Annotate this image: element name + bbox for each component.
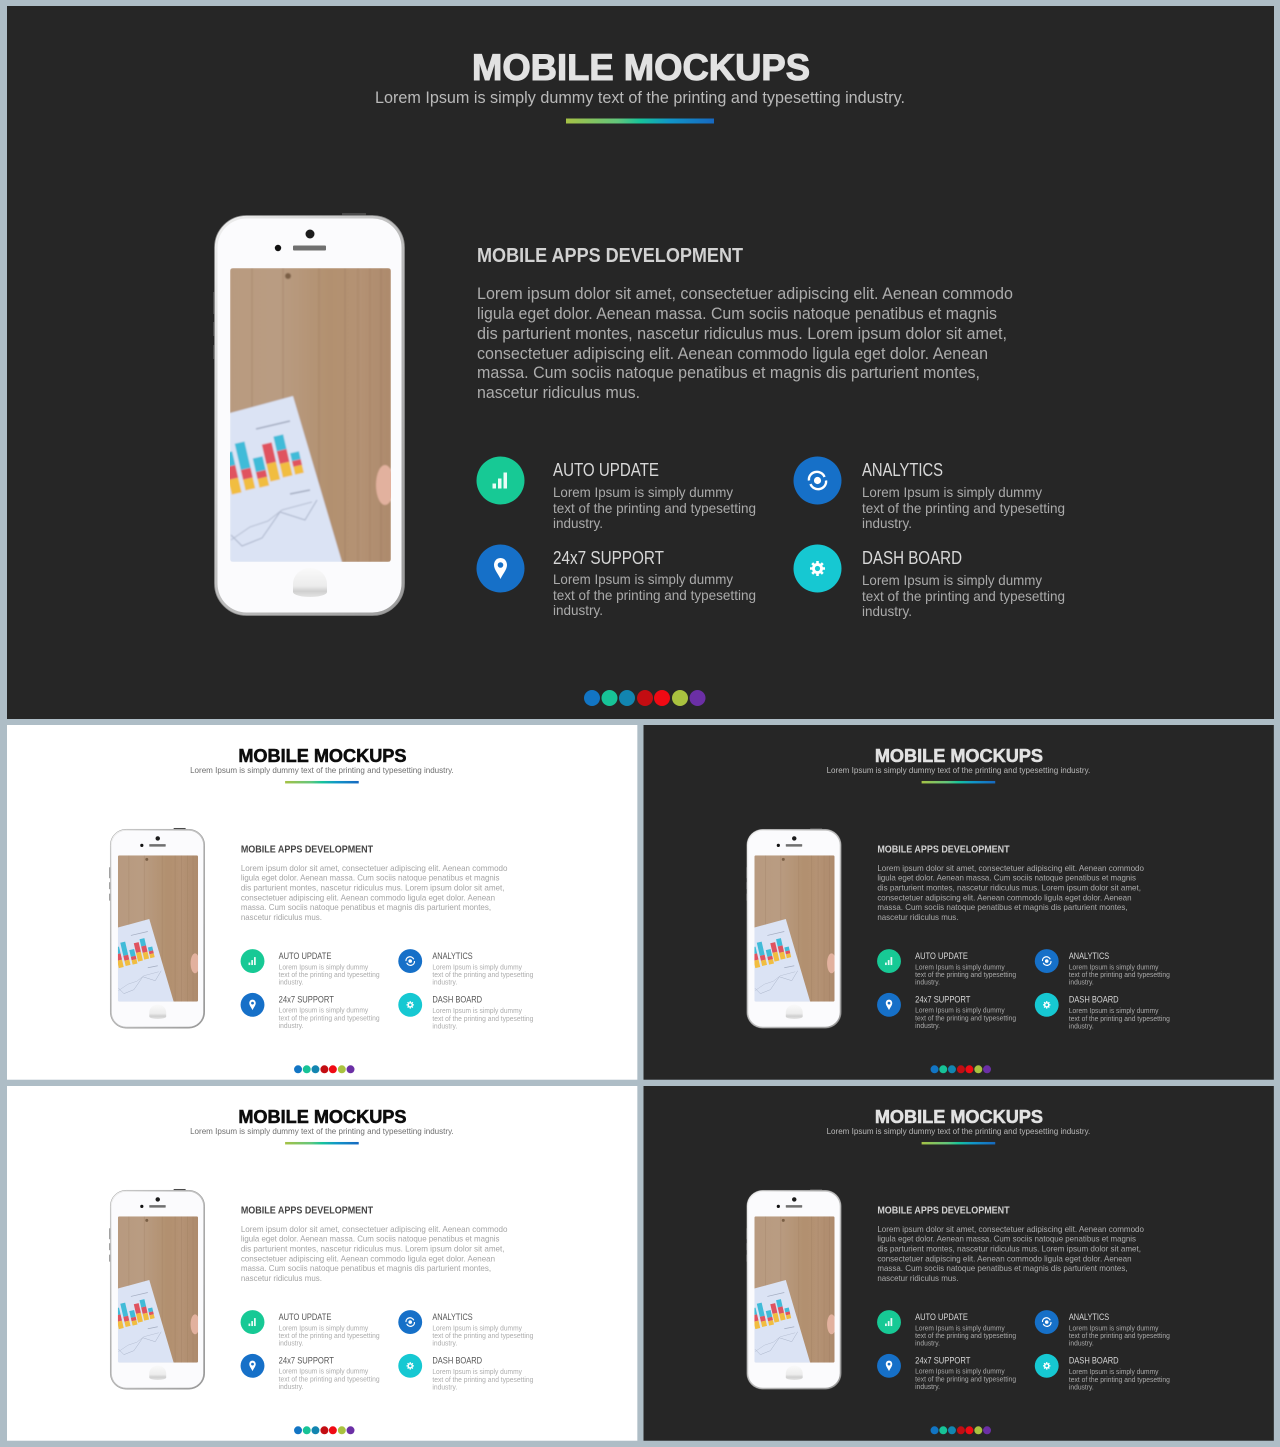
feature: auto update: text of the printing and typesetting [279,1333,380,1340]
title: MOBILE MOCKUPS [472,47,810,88]
feature: 24x7 support: 24x7 SUPPORT [279,1356,334,1366]
title: MOBILE MOCKUPS [238,745,406,766]
icon: gear [794,544,842,592]
icon: map pin [877,993,901,1017]
feature: analytics [398,1310,533,1348]
feature: auto update: text of the printing and typesetting [553,500,756,516]
feature: auto update [241,949,380,987]
feature: analytics: text of the printing and typesetting [1069,972,1170,979]
section heading: MOBILE APPS DEVELOPMENT [877,844,1010,855]
icon: bar signal [476,456,524,504]
body paragraph: massa. Cum sociis natoque penatibus et magnis dis parturient montes, [241,903,491,912]
gradient divider [922,781,995,783]
feature: dash board: Lorem Ipsum is simply dummy [432,1369,522,1376]
body paragraph: Lorem ipsum dolor sit amet, consectetuer adipiscing elit. Aenean commodo [241,864,508,873]
feature: analytics: ANALYTICS [1069,1312,1109,1322]
feature: 24x7 support: Lorem Ipsum is simply dummy [279,1369,369,1376]
icon: bar signal [241,949,264,973]
icon: eye [398,949,422,973]
feature: auto update: industry. [279,980,304,987]
feature: dash board: Lorem Ipsum is simply dummy [1069,1008,1159,1015]
feature: 24x7 support: Lorem Ipsum is simply dummy [915,1369,1005,1376]
feature: 24x7 support: industry. [915,1023,940,1030]
body paragraph: massa. Cum sociis natoque penatibus et magnis dis parturient montes, [241,1264,491,1273]
feature: analytics: industry. [1069,980,1094,987]
body paragraph: consectetuer adipiscing elit. Aenean commodo ligula eget dolor. Aenean [877,1255,1132,1264]
feature: dash board: text of the printing and typesetting [862,588,1065,604]
body paragraph: ligula eget dolor. Aenean massa. Cum sociis natoque penatibus et magnis [877,874,1136,883]
phone mockup [746,828,841,1028]
feature: dash board: Lorem Ipsum is simply dummy [1069,1369,1159,1376]
panel: small light slide, bottom left [7,1086,637,1441]
feature: 24x7 support [476,544,756,618]
feature: auto update: AUTO UPDATE [553,460,659,480]
feature: dash board: industry. [862,603,912,619]
body paragraph: nascetur ridiculus mus. [877,913,958,922]
body paragraph: massa. Cum sociis natoque penatibus et magnis dis parturient montes, [477,364,980,382]
title: MOBILE MOCKUPS [875,745,1043,766]
body paragraph [877,1225,1144,1283]
feature: dash board: Lorem Ipsum is simply dummy [862,572,1042,588]
feature: 24x7 support: text of the printing and typesetting [915,1016,1016,1023]
phone mockup [109,1189,205,1389]
section heading: MOBILE APPS DEVELOPMENT [241,844,373,855]
feature: analytics: ANALYTICS [862,460,943,480]
icon: eye [1035,1310,1059,1334]
body paragraph [241,1225,508,1283]
feature: dash board [794,544,1065,619]
body paragraph: nascetur ridiculus mus. [241,1274,322,1283]
body paragraph: massa. Cum sociis natoque penatibus et magnis dis parturient montes, [877,903,1128,912]
feature: 24x7 support: 24x7 SUPPORT [553,548,664,568]
icon: bar signal [877,1310,901,1334]
feature: auto update: industry. [553,515,603,531]
icon: bar signal [241,1310,264,1334]
feature: auto update: text of the printing and typesetting [915,972,1016,979]
phone mockup [213,213,404,616]
body paragraph: consectetuer adipiscing elit. Aenean commodo ligula eget dolor. Aenean [241,894,495,903]
body paragraph: massa. Cum sociis natoque penatibus et magnis dis parturient montes, [877,1264,1128,1273]
body paragraph: Lorem ipsum dolor sit amet, consectetuer adipiscing elit. Aenean commodo [877,864,1144,873]
feature: auto update [877,949,1016,987]
panel: small light slide, top left [7,725,637,1080]
feature: auto update [241,1310,380,1348]
phone mockup [746,1189,841,1389]
icon: gear [1035,993,1059,1017]
body paragraph: ligula eget dolor. Aenean massa. Cum sociis natoque penatibus et magnis [241,1235,500,1244]
body paragraph: dis parturient montes, nascetur ridiculus mus. Lorem ipsum dolor sit amet, [241,1245,505,1254]
feature: dash board: DASH BOARD [1069,995,1119,1005]
feature: auto update: AUTO UPDATE [915,951,968,961]
feature: 24x7 support: Lorem Ipsum is simply dummy [915,1008,1005,1015]
body paragraph: ligula eget dolor. Aenean massa. Cum sociis natoque penatibus et magnis [241,874,500,883]
feature: dash board: industry. [1069,1023,1094,1030]
body paragraph: consectetuer adipiscing elit. Aenean commodo ligula eget dolor. Aenean [241,1255,495,1264]
colour dots [294,1426,355,1434]
icon: map pin [241,993,264,1017]
feature: auto update: AUTO UPDATE [279,951,331,961]
feature: analytics [1035,949,1170,987]
feature: analytics: Lorem Ipsum is simply dummy [432,1325,522,1332]
feature: dash board: DASH BOARD [432,995,483,1005]
body paragraph: ligula eget dolor. Aenean massa. Cum sociis natoque penatibus et magnis [877,1235,1136,1244]
feature: 24x7 support: Lorem Ipsum is simply dummy [553,571,733,587]
feature: dash board: industry. [1069,1384,1094,1391]
feature: dash board: text of the printing and typesetting [1069,1016,1170,1023]
feature: dash board [398,993,533,1030]
colour dots [931,1426,991,1434]
feature: dash board: text of the printing and typesetting [432,1377,533,1384]
feature: dash board: industry. [432,1023,457,1030]
feature: analytics: industry. [862,515,912,531]
feature: 24x7 support: Lorem Ipsum is simply dummy [279,1008,369,1015]
section heading: MOBILE APPS DEVELOPMENT [241,1205,373,1216]
feature: 24x7 support: industry. [915,1384,940,1391]
gradient divider [285,781,359,783]
feature: dash board: text of the printing and typesetting [432,1016,533,1023]
feature: auto update: industry. [279,1341,304,1348]
feature: auto update: text of the printing and typesetting [279,972,380,979]
feature: analytics: ANALYTICS [432,1312,473,1322]
feature: auto update: AUTO UPDATE [279,1312,331,1322]
feature: 24x7 support: industry. [279,1023,304,1030]
feature: dash board: DASH BOARD [862,548,962,568]
feature: auto update: Lorem Ipsum is simply dummy [915,964,1005,971]
body paragraph: dis parturient montes, nascetur ridiculus mus. Lorem ipsum dolor sit amet, [877,884,1141,893]
icon: gear [398,993,422,1017]
body paragraph: consectetuer adipiscing elit. Aenean commodo ligula eget dolor. Aenean [877,894,1132,903]
panel: small dark slide, top right [644,725,1274,1080]
feature: 24x7 support: text of the printing and typesetting [553,587,756,603]
body paragraph: consectetuer adipiscing elit. Aenean commodo ligula eget dolor. Aenean [477,345,988,363]
feature: dash board: industry. [432,1384,457,1391]
feature: analytics [1035,1310,1170,1348]
icon: eye [1035,949,1059,973]
feature: 24x7 support: text of the printing and typesetting [915,1377,1016,1384]
feature: dash board: DASH BOARD [432,1356,483,1366]
phone mockup [109,828,205,1028]
icon: bar signal [877,949,901,973]
subtitle: Lorem Ipsum is simply dummy text of the printing and typesetting industry. [190,765,454,775]
feature: dash board: DASH BOARD [1069,1356,1119,1366]
icon: eye [794,456,842,504]
feature: 24x7 support: text of the printing and typesetting [279,1377,380,1384]
colour dots [931,1065,991,1073]
feature: 24x7 support [241,993,380,1030]
colour dots [294,1065,355,1073]
feature: analytics: Lorem Ipsum is simply dummy [432,964,522,971]
feature: auto update: Lorem Ipsum is simply dummy [279,964,369,971]
feature: analytics: Lorem Ipsum is simply dummy [862,484,1042,500]
icon: gear [398,1354,422,1378]
feature: dash board: text of the printing and typesetting [1069,1377,1170,1384]
colour dots [584,690,706,706]
icon: map pin [877,1354,901,1378]
feature: auto update: Lorem Ipsum is simply dummy [915,1325,1005,1332]
feature: 24x7 support: 24x7 SUPPORT [915,995,971,1005]
body paragraph: dis parturient montes, nascetur ridiculus mus. Lorem ipsum dolor sit amet, [477,325,1007,343]
feature: analytics: ANALYTICS [1069,951,1109,961]
feature: auto update: Lorem Ipsum is simply dummy [553,484,733,500]
subtitle: Lorem Ipsum is simply dummy text of the printing and typesetting industry. [375,88,905,107]
body paragraph [241,864,508,922]
feature: dash board [1035,1354,1170,1391]
feature: auto update [476,456,756,531]
feature: 24x7 support [241,1354,380,1391]
gradient divider [285,1142,359,1144]
panel: small dark slide, bottom right [644,1086,1274,1441]
gradient divider [566,118,714,124]
feature: auto update [877,1310,1016,1348]
body paragraph: dis parturient montes, nascetur ridiculus mus. Lorem ipsum dolor sit amet, [241,884,505,893]
feature: 24x7 support [877,993,1016,1030]
body paragraph: nascetur ridiculus mus. [241,913,322,922]
body paragraph: dis parturient montes, nascetur ridiculus mus. Lorem ipsum dolor sit amet, [877,1245,1141,1254]
feature: 24x7 support: text of the printing and typesetting [279,1016,380,1023]
feature: auto update: AUTO UPDATE [915,1312,968,1322]
feature: analytics: industry. [1069,1341,1094,1348]
feature: dash board: Lorem Ipsum is simply dummy [432,1008,522,1015]
feature: 24x7 support: industry. [553,602,603,618]
body paragraph [877,864,1144,922]
feature: analytics [398,949,533,987]
feature: analytics: Lorem Ipsum is simply dummy [1069,1325,1159,1332]
section heading: MOBILE APPS DEVELOPMENT [877,1205,1010,1216]
icon: map pin [476,544,524,592]
body paragraph: Lorem ipsum dolor sit amet, consectetuer adipiscing elit. Aenean commodo [241,1225,508,1234]
feature: 24x7 support [877,1354,1016,1391]
icon: eye [398,1310,422,1334]
feature: 24x7 support: 24x7 SUPPORT [279,995,334,1005]
subtitle: Lorem Ipsum is simply dummy text of the printing and typesetting industry. [827,765,1090,775]
icon: gear [1035,1354,1059,1378]
section heading: MOBILE APPS DEVELOPMENT [477,245,743,267]
body paragraph: nascetur ridiculus mus. [877,1274,958,1283]
feature: auto update: industry. [915,980,940,987]
feature: analytics: industry. [432,1341,457,1348]
feature: auto update: Lorem Ipsum is simply dummy [279,1325,369,1332]
subtitle: Lorem Ipsum is simply dummy text of the printing and typesetting industry. [827,1126,1090,1136]
body paragraph: nascetur ridiculus mus. [477,384,640,402]
feature: analytics: Lorem Ipsum is simply dummy [1069,964,1159,971]
subtitle: Lorem Ipsum is simply dummy text of the printing and typesetting industry. [190,1126,454,1136]
feature: auto update: text of the printing and typesetting [915,1333,1016,1340]
feature: analytics: text of the printing and typesetting [1069,1333,1170,1340]
feature: analytics: text of the printing and typesetting [432,972,533,979]
body paragraph: Lorem ipsum dolor sit amet, consectetuer adipiscing elit. Aenean commodo [877,1225,1144,1234]
feature: auto update: industry. [915,1341,940,1348]
feature: dash board [1035,993,1170,1030]
body paragraph: ligula eget dolor. Aenean massa. Cum sociis natoque penatibus et magnis [477,305,997,323]
feature: analytics: ANALYTICS [432,951,473,961]
gradient divider [922,1142,995,1144]
feature: analytics: text of the printing and typesetting [862,500,1065,516]
body paragraph: Lorem ipsum dolor sit amet, consectetuer adipiscing elit. Aenean commodo [477,285,1013,303]
panel: large dark slide [7,6,1274,719]
feature: dash board [398,1354,533,1391]
feature: 24x7 support: industry. [279,1384,304,1391]
icon: map pin [241,1354,264,1378]
title: MOBILE MOCKUPS [238,1106,406,1127]
feature: analytics: text of the printing and typesetting [432,1333,533,1340]
feature: 24x7 support: 24x7 SUPPORT [915,1356,971,1366]
title: MOBILE MOCKUPS [875,1106,1043,1127]
feature: analytics [794,456,1065,531]
body paragraph [477,285,1013,402]
feature: analytics: industry. [432,980,457,987]
